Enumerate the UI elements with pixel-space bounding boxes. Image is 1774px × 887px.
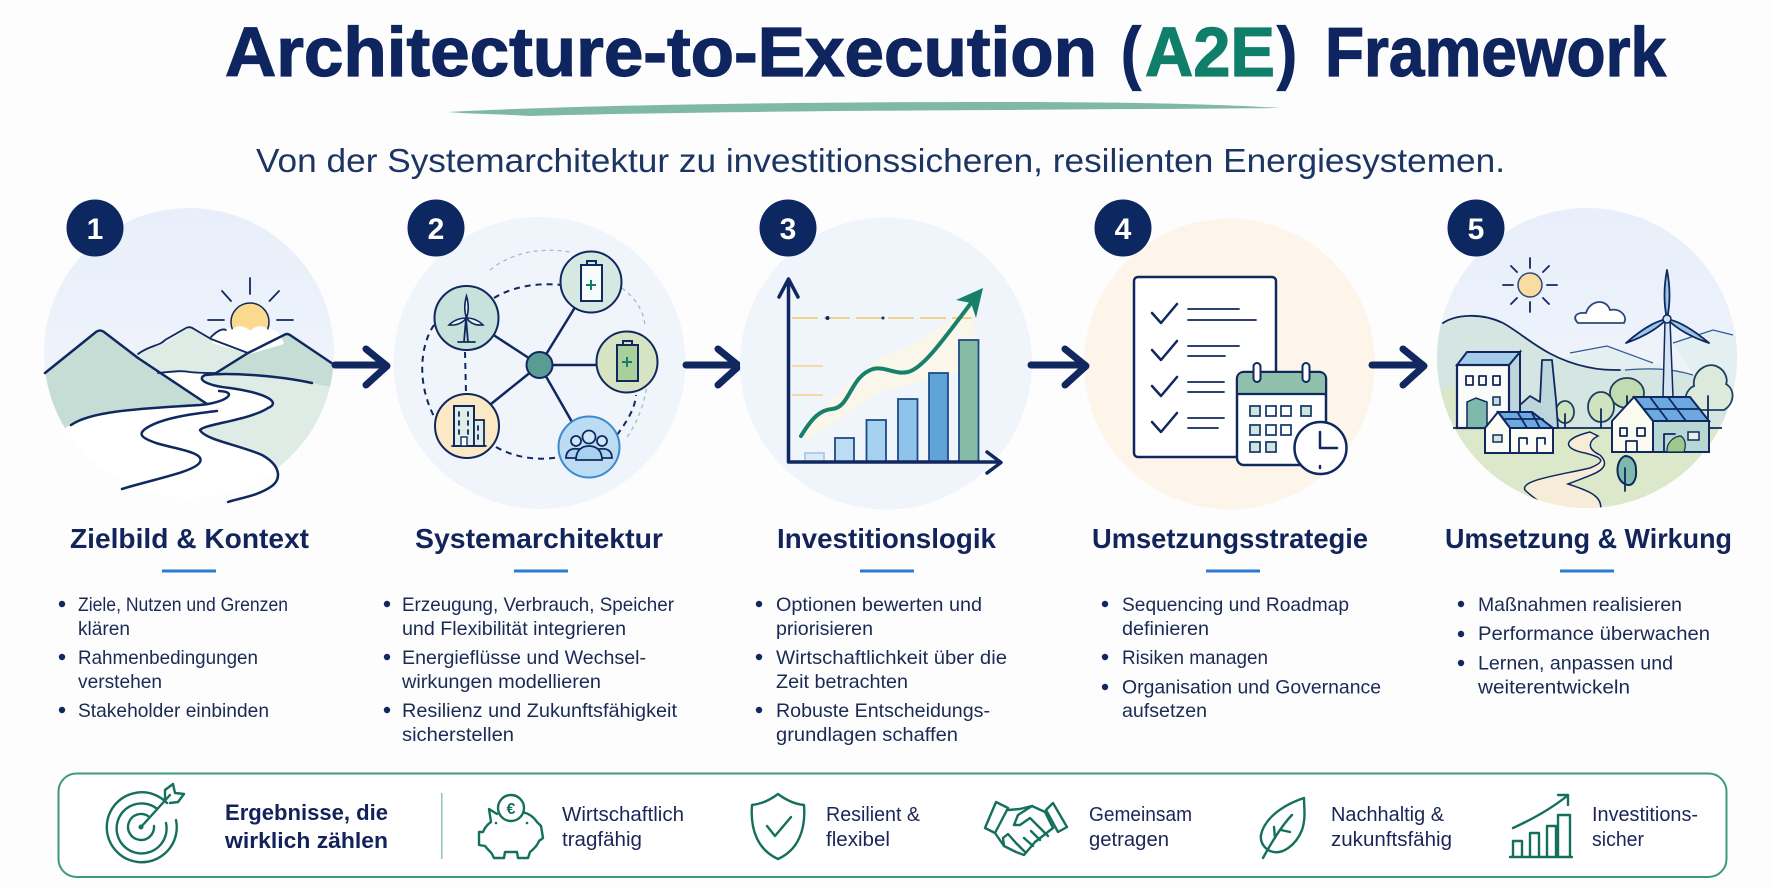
result: economically viable: Wirtschaftlich — [562, 804, 684, 826]
growth trend arrow — [801, 288, 983, 436]
result: shared: Gemeinsam — [1089, 804, 1192, 826]
icon: clock — [1294, 422, 1346, 474]
result: sustainable — [1331, 804, 1452, 851]
step 2: number badge: 2 — [428, 213, 444, 246]
icon: shield — [752, 794, 804, 859]
step 3: illustration growth chart — [740, 218, 1032, 510]
column 5: bullet list: Maßnahmen realisieren — [1478, 594, 1682, 616]
icon: ground line — [1453, 427, 1722, 429]
step 2: number badge — [408, 200, 464, 256]
column 5: bullet list — [1458, 594, 1710, 698]
step 4: number badge: 4 — [1115, 213, 1132, 246]
icon: building node — [435, 394, 499, 458]
column 1: bullet list: verstehen — [78, 671, 162, 693]
step 1: number badge — [66, 200, 124, 256]
result: resilient — [826, 804, 921, 851]
icon: piggy bank: € — [507, 801, 516, 818]
title: Architecture-to-Execution — [225, 13, 1097, 91]
step 1: illustration landscape — [40, 208, 345, 512]
result: economically viable — [562, 804, 684, 851]
column 3: bullet list: grundlagen schaffen — [776, 724, 958, 746]
icon: piggy bank — [479, 795, 543, 858]
icon: factory — [1510, 360, 1558, 428]
chart axes — [779, 279, 1001, 473]
column 2: bullet list — [384, 594, 678, 746]
column 3: bullet list: Wirtschaftlichkeit über die — [776, 647, 1007, 669]
step 5: illustration sustainable town — [1436, 208, 1740, 513]
icon: wind turbine node — [434, 286, 498, 350]
column 3: bullet list: Optionen bewerten und — [776, 594, 982, 616]
column 2: bullet list: Erzeugung, Verbrauch, Speicher — [402, 594, 674, 616]
icon: handshake — [985, 802, 1067, 855]
column 1: bullet list: klären — [78, 618, 130, 640]
column 5: bullet list: Lernen, anpassen und — [1478, 652, 1673, 674]
icon: solar house — [1612, 397, 1709, 452]
calendar — [1237, 363, 1326, 465]
icon: rising chart — [1510, 795, 1572, 857]
icon: trees — [1556, 365, 1733, 428]
step 5: number badge: 5 — [1468, 213, 1484, 246]
column 3: bullet list: Zeit betrachten — [776, 671, 908, 693]
column 3: bullet list: priorisieren — [776, 618, 873, 640]
column 4: bullet list: Organisation und Governance — [1122, 676, 1381, 698]
column 1: heading: Zielbild & Kontext — [70, 523, 309, 554]
title: ) — [1277, 13, 1297, 91]
column 1: bullet list: Stakeholder einbinden — [78, 700, 269, 722]
icon: sun — [1503, 258, 1557, 312]
icon: wind turbine — [1626, 270, 1709, 397]
icon: battery node green — [596, 332, 658, 392]
bar chart — [805, 340, 978, 462]
panel heading: Ergebnisse, die — [225, 800, 388, 825]
column 2: bullet list: Resilienz und Zukunftsfähigkeit — [402, 700, 678, 722]
result: investment-safe: Investitions- — [1592, 804, 1698, 826]
step 2: illustration network — [394, 217, 686, 509]
icon: apartment building — [1457, 352, 1520, 428]
result: resilient: flexibel — [826, 829, 890, 851]
step 4: number badge — [1094, 200, 1152, 256]
panel heading: wirklich zählen — [224, 828, 388, 853]
column 2: bullet list: wirkungen modellieren — [401, 671, 601, 693]
result: shared — [1089, 804, 1192, 851]
icon: people node — [558, 416, 620, 478]
title: A2E — [1145, 13, 1275, 91]
icon: target — [107, 784, 184, 862]
column 3: bullet list — [756, 594, 1007, 746]
column 3: heading: Investitionslogik — [777, 523, 996, 554]
step 3: number badge — [760, 200, 816, 256]
column 4: bullet list: Sequencing und Roadmap — [1122, 594, 1349, 616]
icon: small tree — [1618, 456, 1636, 491]
step 5: number badge — [1448, 200, 1504, 256]
column 3: bullet list: Robuste Entscheidungs- — [776, 700, 990, 722]
arrow 4 to 5 — [1372, 349, 1424, 385]
step 1: number badge: 1 — [87, 213, 103, 246]
arrow 3 to 4 — [1031, 349, 1086, 385]
column 5: bullet list: Performance überwachen — [1478, 623, 1710, 645]
icon: small house — [1485, 412, 1553, 453]
column 4: bullet list: Risiken managen — [1122, 647, 1268, 669]
panel: results — [58, 774, 1726, 877]
step 3: number badge: 3 — [780, 213, 796, 246]
column 4: heading: Umsetzungsstrategie — [1092, 523, 1368, 554]
column 4: bullet list — [1102, 594, 1381, 722]
icon: hub — [526, 352, 552, 378]
subtitle: Von der Systemarchitektur zu investitionssicheren, resilienten Energiesystemen. — [256, 142, 1505, 179]
panel heading — [224, 800, 388, 853]
column 5: heading: Umsetzung & Wirkung — [1445, 523, 1732, 554]
title: ( — [1121, 13, 1142, 91]
column 5: bullet list: weiterentwickeln — [1477, 676, 1630, 698]
result: shared: getragen — [1089, 829, 1169, 851]
icon: sun — [208, 278, 293, 354]
result: investment-safe — [1592, 804, 1698, 851]
result: economically viable: tragfähig — [562, 829, 642, 851]
column 4: bullet list: definieren — [1122, 618, 1209, 640]
column 1: bullet list: Ziele, Nutzen und Grenzen — [78, 594, 288, 616]
title underline brush stroke — [448, 102, 1280, 116]
column 1: bullet list — [59, 594, 288, 722]
column 4: bullet list: aufsetzen — [1122, 700, 1207, 722]
result: sustainable: zukunftsfähig — [1331, 829, 1452, 851]
result: investment-safe: sicher — [1592, 829, 1644, 851]
checklist document — [1134, 277, 1276, 457]
arrow 1 to 2 — [335, 349, 387, 385]
result: sustainable: Nachhaltig & — [1331, 804, 1445, 826]
icon: leaf — [1261, 798, 1304, 858]
icon: cloud — [1575, 302, 1625, 323]
column 2: bullet list: und Flexibilität integrieren — [402, 618, 626, 640]
result: resilient: Resilient & — [826, 804, 921, 826]
arrow 2 to 3 — [686, 349, 739, 385]
step 4: illustration checklist and calendar — [1084, 218, 1375, 510]
column 2: bullet list: Energieflüsse und Wechsel- — [402, 647, 646, 669]
column 1: bullet list: Rahmenbedingungen — [78, 647, 258, 669]
column 2: heading: Systemarchitektur — [415, 523, 663, 554]
icon: battery node — [560, 252, 622, 312]
title — [225, 13, 1666, 91]
title: Framework — [1325, 13, 1666, 91]
column 2: bullet list: sicherstellen — [402, 724, 514, 746]
